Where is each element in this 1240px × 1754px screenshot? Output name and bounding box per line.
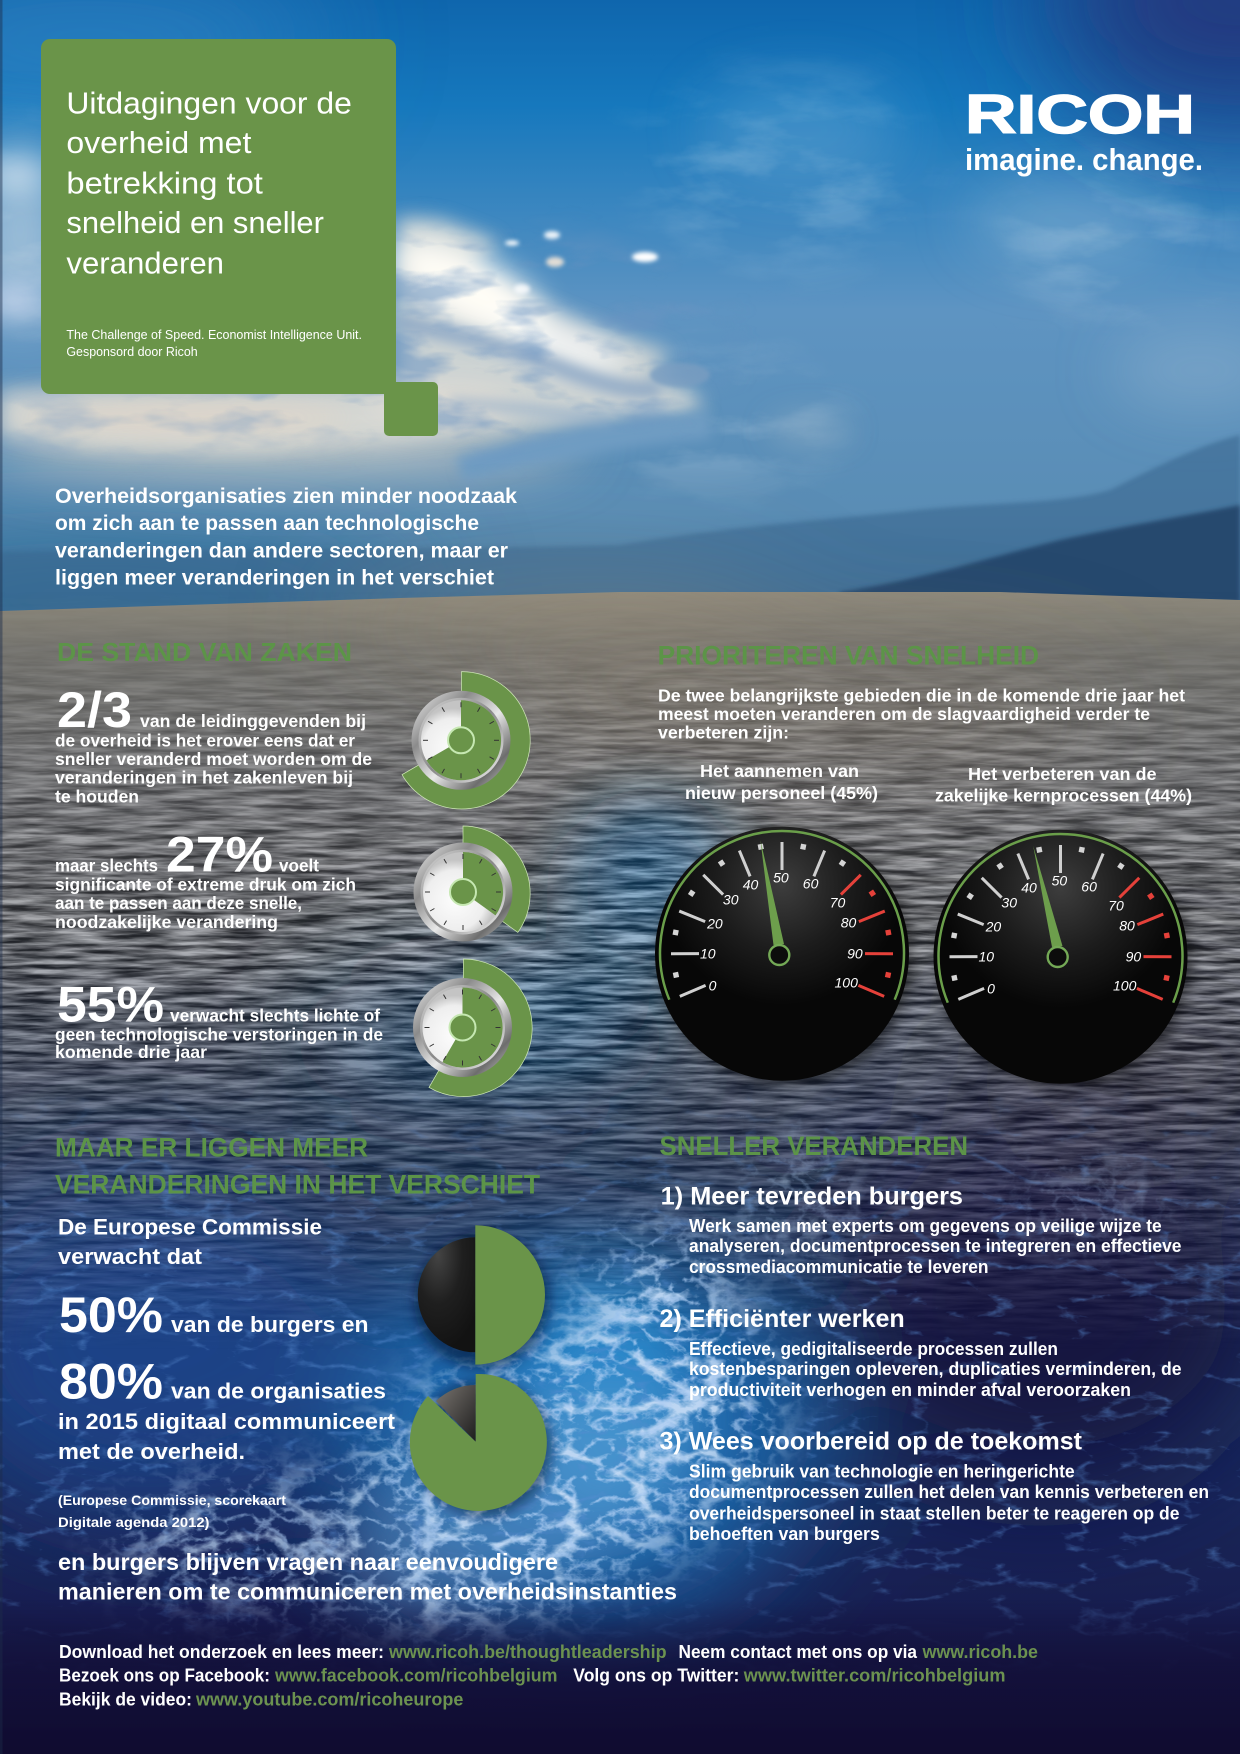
item 2: kostenbesparingen opleveren, duplicaties verminderen, de	[689, 1359, 1182, 1379]
pie chart: 80%	[410, 1374, 552, 1516]
item 3	[660, 1428, 1209, 1544]
panel: sneller veranderen	[660, 1131, 1209, 1544]
clock gauge: 27%	[414, 826, 530, 942]
stat: 55%: geen technologische verstoringen in de	[55, 1025, 383, 1045]
item 3: documentprocessen zullen het delen van kennis verbeteren en	[689, 1482, 1209, 1502]
speedometer caption: 45%: nieuw personeel (45%)	[685, 783, 878, 803]
speedometer: 45%: 70	[830, 894, 845, 910]
speech box shape	[41, 39, 438, 436]
stat: 55%	[55, 977, 383, 1062]
stat: 55%: verwacht slechts lichte of	[170, 1006, 380, 1026]
clock gauge: 55%	[413, 959, 532, 1097]
speedometer: 44%: 20	[985, 918, 1001, 934]
closing statement: manieren om te communiceren met overheidsinstanties	[58, 1579, 677, 1605]
text block: De twee belangrijkste gebieden die in de komende drie jaar het	[658, 686, 1185, 706]
speedometer: 44%	[934, 830, 1192, 1089]
title panel	[41, 39, 438, 436]
footer links	[59, 1642, 1038, 1710]
item 2: 2) Efficiënter werken	[660, 1305, 905, 1333]
stat: 80%: van de organisaties	[171, 1379, 386, 1404]
title	[66, 86, 352, 281]
footer links: Bezoek ons op Facebook:	[59, 1666, 270, 1686]
speedometer: 45%: 10	[700, 945, 716, 961]
intro text: Overheidsorganisaties zien minder noodzaak	[55, 485, 517, 508]
speedometer: 44%: 80	[1119, 917, 1135, 933]
intro text	[55, 485, 517, 589]
item 3: 3) Wees voorbereid op de toekomst	[660, 1428, 1083, 1456]
source note	[66, 328, 362, 359]
heading	[55, 1132, 540, 1199]
closing statement	[58, 1549, 677, 1605]
panel: maar er liggen meer veranderingen	[55, 1132, 677, 1605]
speedometer: 45%: 40	[743, 876, 758, 892]
closing statement: en burgers blijven vragen naar eenvoudigere	[58, 1549, 558, 1575]
speedometer: 45%	[655, 827, 913, 1086]
speedometer caption: 44%	[935, 764, 1192, 806]
stat: 80%: in 2015 digitaal communiceert	[58, 1409, 396, 1434]
item 3: overheidspersoneel in staat stellen beter te reageren op de	[689, 1504, 1180, 1524]
speedometer caption: 44%: zakelijke kernprocessen (44%)	[935, 786, 1192, 806]
stat: 27%	[55, 827, 356, 932]
speedometer: 44%: 100	[1113, 977, 1137, 993]
speedometer: 45%: 50	[773, 869, 789, 885]
speedometer: 45%: 20	[706, 915, 723, 931]
text block: Europese Commissie: verwacht dat	[58, 1244, 203, 1269]
speedometer: 45%: 30	[723, 891, 739, 907]
source note: The Challenge of Speed. Economist Intelligence Unit.	[66, 328, 362, 342]
footer links: www.ricoh.be/thoughtleadership	[388, 1642, 667, 1662]
stat: 2/3: sneller veranderd moet worden om de	[55, 749, 372, 769]
footer links: Download het onderzoek en lees meer:	[59, 1642, 384, 1662]
stat: 55%: 55%	[57, 977, 164, 1033]
source note: Gesponsord door Ricoh	[66, 345, 198, 359]
speedometer: 45%: 60	[803, 875, 819, 891]
stat: 80%: met de overheid.	[58, 1439, 245, 1464]
speedometer: 44%: 70	[1108, 897, 1124, 913]
stat: 27%: significante of extreme druk om zich	[55, 875, 356, 895]
source note	[58, 1492, 286, 1530]
speedometer: 44%: 90	[1126, 948, 1141, 964]
panel: prioriteren van snelheid	[655, 640, 1192, 1089]
stat: 27%: 27%	[166, 827, 273, 883]
speedometer: 44%: 60	[1081, 878, 1097, 894]
speedometer: 44%: 10	[979, 948, 994, 964]
heading: MAAR ER LIGGEN MEER	[55, 1132, 368, 1162]
footer links: www.ricoh.be	[922, 1642, 1038, 1662]
title: veranderen	[66, 246, 224, 281]
footer links: www.facebook.com/ricohbelgium	[274, 1666, 558, 1686]
logo: Ricoh: RICOH	[965, 83, 1195, 145]
item 1: analyseren, documentprocessen te integreren en effectieve	[689, 1236, 1182, 1256]
footer links: www.twitter.com/ricohbelgium	[743, 1666, 1006, 1686]
item 1: Werk samen met experts om gegevens op veilige wijze te	[689, 1216, 1162, 1236]
item 3: behoeften van burgers	[689, 1524, 880, 1544]
intro text: om zich aan te passen aan technologische	[55, 512, 479, 535]
clock gauge: 2/3	[402, 672, 530, 809]
source note: Digitale agenda 2012)	[58, 1514, 210, 1530]
pie chart: 50%	[414, 1225, 550, 1368]
speedometer caption: 44%: Het verbeteren van de	[968, 764, 1157, 784]
stat: 2/3	[55, 682, 372, 807]
text block: Europese Commissie: De Europese Commissie	[58, 1214, 322, 1239]
heading: PRIORITEREN VAN SNELHEID	[658, 640, 1039, 670]
speedometer caption: 45%	[685, 761, 878, 803]
heading: SNELLER VERANDEREN	[660, 1131, 968, 1161]
stat: 2/3: veranderingen in het zakenleven bij	[55, 768, 353, 788]
source note: (Europese Commissie, scorekaart	[58, 1492, 286, 1508]
item 2: Effectieve, gedigitaliseerde processen zullen	[689, 1339, 1058, 1359]
stat: 27%: voelt	[279, 856, 319, 876]
speedometer: 44%: 50	[1052, 872, 1067, 888]
logo: Ricoh	[965, 83, 1203, 177]
title: Uitdagingen voor de	[66, 86, 352, 120]
speedometer: 45%: 90	[847, 945, 863, 961]
stat: 2/3: van de leidinggevenden bij	[140, 711, 366, 731]
heading: VERANDERINGEN IN HET VERSCHIET	[55, 1169, 540, 1199]
item 3: Slim gebruik van technologie en heringerichte	[689, 1462, 1075, 1482]
stat: 80%	[58, 1354, 396, 1464]
title: betrekking tot	[66, 166, 263, 201]
footer links: Bekijk de video:	[59, 1690, 192, 1710]
stat: 2/3: te houden	[55, 787, 139, 807]
panel: de stand van zaken	[55, 637, 532, 1097]
speedometer: 44%: 0	[987, 981, 995, 997]
speedometer: 45%: 0	[709, 978, 717, 994]
text block: Europese Commissie	[58, 1214, 322, 1269]
intro text: liggen meer veranderingen in het verschiet	[55, 566, 494, 589]
item 1: 1) Meer tevreden burgers	[661, 1182, 963, 1210]
item 1: crossmediacommunicatie te leveren	[689, 1257, 988, 1277]
item 2	[660, 1305, 1182, 1400]
text block	[658, 686, 1185, 742]
stat: 80%: 80%	[59, 1354, 163, 1410]
stat: 2/3: 2/3	[57, 682, 132, 738]
item 2: productiviteit verhogen en minder afval veroorzaken	[689, 1380, 1131, 1400]
speedometer: 45%: 80	[841, 914, 856, 930]
stat: 50%: van de burgers en	[171, 1312, 368, 1337]
stat: 50%: 50%	[59, 1287, 163, 1343]
stat: 2/3: de overheid is het erover eens dat er	[55, 731, 355, 751]
stat: 50%	[59, 1287, 368, 1343]
text block: verbeteren zijn:	[658, 722, 789, 742]
speedometer: 44%: 30	[1001, 894, 1017, 910]
item 1	[661, 1182, 1182, 1277]
title: snelheid en sneller	[66, 205, 324, 240]
title: overheid met	[66, 125, 252, 160]
footer links: Volg ons op Twitter:	[573, 1666, 739, 1686]
stat: 27%: noodzakelijke verandering	[55, 912, 278, 932]
text block: meest moeten veranderen om de slagvaardigheid verder te	[658, 704, 1150, 724]
intro text: veranderingen dan andere sectoren, maar er	[55, 540, 508, 562]
stat: 55%: komende drie jaar	[55, 1042, 207, 1062]
logo: Ricoh: imagine. change.	[965, 142, 1203, 177]
stat: 27%: aan te passen aan deze snelle,	[55, 893, 302, 913]
stat: 27%: maar slechts	[55, 856, 158, 876]
speedometer: 45%: 100	[835, 974, 858, 990]
speedometer: 44%: 40	[1021, 879, 1037, 895]
footer links: Neem contact met ons op via	[678, 1642, 918, 1662]
heading: DE STAND VAN ZAKEN	[57, 637, 352, 667]
speedometer caption: 45%: Het aannemen van	[700, 761, 859, 781]
footer links: www.youtube.com/ricoheurope	[195, 1690, 463, 1710]
